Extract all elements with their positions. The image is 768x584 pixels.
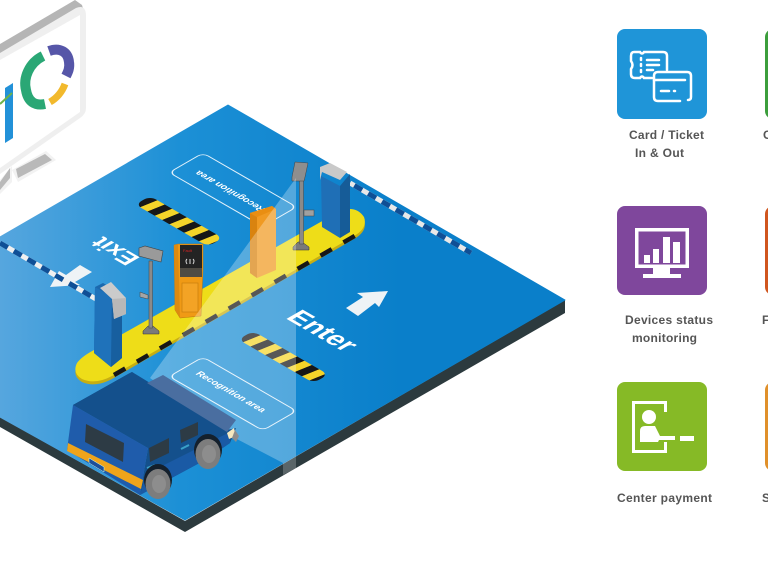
- icon: monitor chart: [635, 228, 689, 278]
- hazard bar bottom: [238, 331, 328, 383]
- tile: device monitoring: [617, 206, 707, 295]
- enter label: Enter: [280, 306, 366, 356]
- label: card ticket: In & Out: [635, 146, 684, 160]
- label: card ticket: Card / Ticket: [629, 128, 704, 142]
- tile: orange red partial: [765, 206, 768, 295]
- tile: orange partial: [765, 382, 768, 471]
- rear window: [85, 424, 124, 462]
- light beam: [150, 178, 296, 475]
- left barrier: [94, 282, 126, 367]
- vehicle: [67, 372, 239, 499]
- parking platform: [0, 105, 565, 532]
- logo arcs: [0, 50, 69, 143]
- label: device monitoring: [625, 313, 713, 345]
- barrier arm left: [0, 243, 96, 299]
- entry camera: [292, 162, 314, 250]
- label: device monitoring: Devices status: [625, 313, 713, 327]
- door handles: [147, 465, 155, 468]
- tile: card ticket: [617, 29, 707, 119]
- orange pillar: [250, 206, 276, 278]
- label: card ticket: [629, 128, 704, 160]
- bumper stripe: [67, 443, 143, 489]
- right barrier: [320, 163, 350, 238]
- monitor frame: [0, 0, 84, 60]
- enter arrow: [346, 291, 388, 316]
- yellow island: [75, 209, 365, 384]
- platform floor: [0, 105, 565, 520]
- tile: green partial: [765, 29, 768, 119]
- hood: [147, 375, 236, 432]
- exit camera: [139, 246, 163, 334]
- barrier arm right: [350, 183, 471, 253]
- recognition area top: Recognition area: [192, 169, 269, 213]
- wheels: [144, 434, 222, 499]
- monitor with logo: [0, 0, 86, 194]
- licence plate: [89, 458, 104, 472]
- recognition area bottom: Recognition area: [192, 370, 269, 414]
- hazard bar top: [135, 196, 223, 246]
- icon: tickets: [631, 52, 691, 101]
- roof: [73, 372, 227, 448]
- island kerb stripes: [114, 234, 358, 375]
- headlight: [227, 428, 236, 439]
- exit label: Exit: [85, 233, 146, 269]
- icon: cashier: [632, 401, 694, 453]
- monitor stand: [0, 151, 56, 194]
- label: center payment: Center payment: [617, 491, 712, 505]
- recognition area bottom: [169, 357, 297, 430]
- tile: center payment: [617, 382, 707, 471]
- payment kiosk: [174, 244, 203, 318]
- side and roof body: [73, 372, 236, 495]
- exit arrow: [50, 265, 92, 287]
- platform edge: [0, 300, 565, 532]
- label: device monitoring: monitoring: [632, 331, 697, 345]
- recognition area top: [169, 153, 297, 226]
- side windows: [149, 438, 169, 462]
- payment kiosk: Fault: [183, 248, 193, 253]
- rear face: [67, 405, 148, 495]
